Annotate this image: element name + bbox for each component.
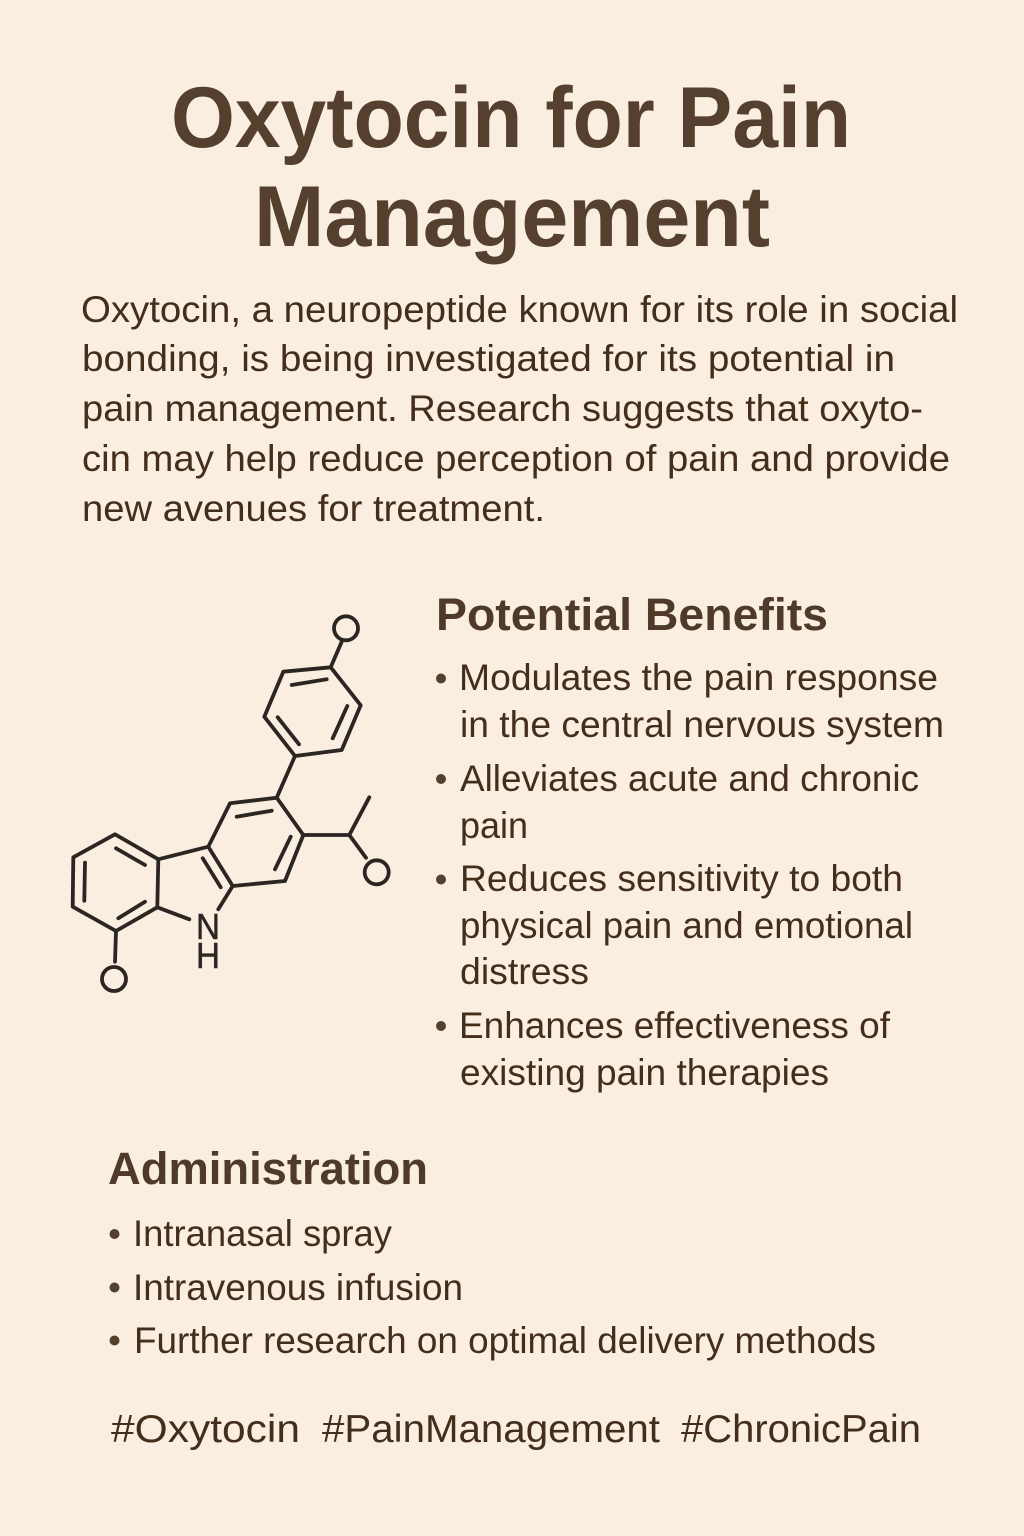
bullet: reduces sensitivity (436, 857, 913, 992)
bullet: intravenous infusion: Intravenous infusion (133, 1266, 463, 1308)
hashtags (111, 1408, 921, 1451)
bullet: alleviates pain: Alleviates acute and chronic (460, 757, 919, 799)
title: Management (254, 169, 770, 265)
side chain with oxygen (303, 797, 389, 884)
NH label (196, 906, 220, 976)
left ring (73, 834, 233, 931)
top hexagon ring (264, 667, 361, 756)
top oxygen atom (331, 616, 358, 667)
bullet: enhances effectiveness: Enhances effectiveness of (459, 1004, 891, 1046)
intro paragraph: bonding, is being investigated for its potential in (82, 337, 895, 379)
bullet: reduces sensitivity: distress (460, 950, 589, 992)
molecule diagram (73, 616, 389, 991)
heading: administration: Administration (108, 1143, 428, 1194)
bullet: reduces sensitivity: physical pain and emotional (460, 904, 913, 946)
bullet: reduces sensitivity: Reduces sensitivity to both (460, 857, 903, 899)
bullet: further research: Further research on optimal delivery methods (134, 1319, 876, 1361)
NH label: N (196, 906, 220, 947)
panel: potential benefits (436, 589, 944, 1093)
heading: potential benefits: Potential Benefits (436, 589, 828, 640)
middle ring (203, 756, 303, 887)
intro paragraph: new avenues for treatment. (82, 487, 545, 529)
intro paragraph: cin may help reduce perception of pain and provide (82, 437, 950, 479)
title (171, 70, 851, 265)
bullet: alleviates pain: pain (460, 804, 528, 846)
NH label: H (196, 935, 220, 976)
title: Oxytocin for Pain (171, 70, 851, 166)
bullet: modulates pain response (436, 656, 944, 745)
bottom oxygen atom (102, 931, 126, 991)
hashtags: #Oxytocin (111, 1408, 300, 1451)
hashtags: #ChronicPain (681, 1408, 921, 1451)
intro paragraph (81, 288, 958, 529)
panel: administration (108, 1143, 876, 1361)
bullet: enhances effectiveness: existing pain therapies (460, 1051, 829, 1093)
hashtags: #PainManagement (322, 1408, 660, 1451)
bullet: alleviates pain (436, 757, 919, 846)
intro paragraph: pain management. Research suggests that oxyto- (82, 387, 923, 429)
bullet: intranasal spray: Intranasal spray (133, 1212, 392, 1254)
bullet: enhances effectiveness (436, 1004, 891, 1093)
bullet: modulates pain response: in the central nervous system (460, 703, 944, 745)
bullet: modulates pain response: Modulates the pain response (459, 656, 938, 698)
intro paragraph: Oxytocin, a neuropeptide known for its role in social (81, 288, 958, 330)
